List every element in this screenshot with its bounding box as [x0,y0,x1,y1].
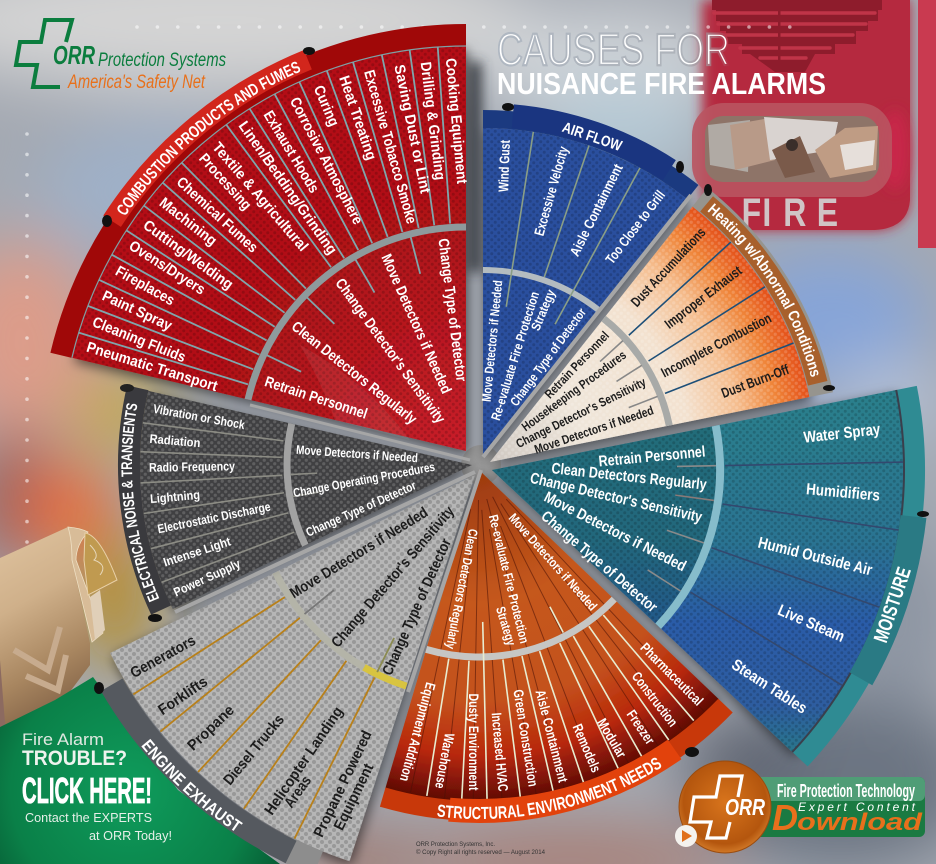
combustion inner remedies [263,238,470,428]
moisture inner remedies: Retrain Personnel [598,444,706,470]
engine exhaust outer causes [127,632,377,840]
structural outer causes: Green Construction [510,688,542,788]
electrical inner remedies: Change Type of Detector [304,478,418,540]
combustion ribbon: COMBUSTION PRODUCTS AND FUMES [117,62,300,215]
moisture outer causes: Humidifiers [805,481,881,505]
engine exhaust ribbon [94,678,296,864]
alarm strobe lens [692,103,892,197]
combustion outer causes: Drilling & Grinding [417,61,448,181]
panel: combustion products and fumes [50,24,476,460]
heating inner remedies: Move Detectors if Needed [533,403,655,457]
heating outer causes: Incomplete Combustion [658,310,774,380]
structural ribbon: STRUCTURAL ENVIRONMENT NEEDS [437,758,662,820]
call to action: green panel [0,677,280,864]
combustion outer causes: Processing [195,150,255,214]
combustion outer causes: Linen/Bedding/Grinding [235,118,340,258]
heating ribbon: Heating w/Abnormal Conditions [708,203,818,377]
structural outer causes: Modular [594,715,630,761]
scroll graphic [0,527,117,735]
logo: America's Safety Net [67,72,206,93]
sector separators [175,195,691,692]
heating inner remedies: Housekeeping Procedures [519,348,629,434]
combustion outer causes: Fireplaces [112,263,178,309]
electrical outer causes: Vibration or Shock [152,402,246,432]
call to action: green panel: CLICK HERE! [22,770,152,811]
download badge: D [772,797,798,838]
alarm FIRE lettering: FIRE [742,190,838,235]
electrical inner remedies: Move Detectors if Needed [296,443,418,465]
combustion inner remedies: Retrain Personnel [263,373,369,423]
panel: engine exhaust [94,476,476,864]
air flow outer causes: Excessive Velocity [531,144,571,237]
engine exhaust outer causes: Areas [281,773,315,811]
engine exhaust outer causes: Generators [127,632,199,682]
hub [461,445,501,485]
panel: electrical noise and transients [118,384,474,622]
engine exhaust inner remedies: Change Detector's Sensitivity [328,503,458,651]
copyright: © Copy Right all rights reserved — August 2014 [416,848,545,856]
decorative dots [27,27,800,545]
combustion outer causes: Cutting/Welding [140,217,236,293]
air flow outer causes: Too Close to Grill [602,187,668,267]
structural outer causes: Remodels [570,721,604,775]
electrical outer causes [149,402,272,599]
panel: structural environment needs [380,470,733,823]
engine exhaust outer causes: Propane Powered [310,728,376,840]
engine exhaust inner remedies: Change Type of Detector [379,536,455,678]
download badge: ORR [725,794,765,820]
heating inner remedies: Retrain Personnel [542,329,612,401]
electrical outer causes: Lightning [149,488,201,506]
electrical outer causes: Electrostatic Discharge [156,500,272,536]
download badge [675,761,925,853]
download badge: ownload [797,809,924,836]
logo: Protection Systems [98,50,226,71]
logo [16,20,226,93]
structural inner remedies [443,510,600,651]
copyright [416,841,545,856]
engine exhaust outer causes: Helicopter Landing [261,704,347,818]
combustion outer causes: Pneumatic Transport [85,339,219,395]
air flow inner remedies: Move Detectors if Needed [479,280,505,402]
structural outer causes: Pharmaceutical [637,639,707,709]
heating outer causes: Improper Exhaust [661,262,745,332]
combustion outer causes: Cleaning Fluids [90,314,188,366]
combustion inner remedies: Change Type of Detector [434,238,470,383]
combustion outer causes: Curing [310,83,342,129]
moisture outer causes [728,421,881,718]
title: CAUSES FOR [497,24,730,75]
call to action: green panel: at ORR Today! [89,828,172,843]
structural inner remedies: Move Detectors if Needed [506,510,600,614]
structural outer causes [397,639,707,792]
combustion outer causes: Exhaust Hoods [260,108,322,196]
combustion outer causes: Chemical Fumes [173,174,261,256]
electrical outer causes: Power Supply [171,557,243,599]
combustion outer causes: Ovens/Dryers [126,237,208,299]
moisture inner remedies [528,444,708,616]
structural inner remedies: Strategy [493,605,519,648]
air flow inner remedies: Change Type of Detector [507,305,589,409]
call to action: green panel: TROUBLE? [22,747,127,770]
moisture ribbon: MOISTURE [870,565,916,645]
combustion outer causes: Textile & Agricultural [209,139,311,255]
air flow outer causes [495,139,668,267]
panel: moisture [492,388,929,759]
fire alarm device [692,0,936,248]
structural inner remedies: Re-evaluate Fire Protection [486,513,532,645]
call to action: green panel: Contact the EXPERTS [25,810,152,825]
moisture inner remedies: Clean Detectors Regularly [551,460,708,494]
structural outer causes: Freezer [624,707,659,748]
air flow outer causes: Aisle Containment [566,161,626,259]
electrical outer causes: Radio Frequency [149,459,235,475]
heating inner remedies: Change Detector's Sensitivity [514,375,648,451]
air flow outer causes: Wind Gust [495,139,513,192]
electrical inner remedies: Change Operating Procedures [292,460,436,500]
electrical inner remedies [292,443,436,540]
alarm horn grille [712,0,882,72]
electrical outer causes: Intense Light [162,534,233,569]
title: NUISANCE FIRE ALARMS [497,66,826,101]
panel: heating with abnormal conditions [490,184,835,469]
structural outer causes: Aisle Containment [533,688,572,784]
structural outer causes: Dusty Environment [466,694,482,791]
electrical ribbon: ELECTRICAL NOISE & TRANSIENTS [121,403,160,602]
engine exhaust outer causes: Forklifts [155,673,211,719]
engine exhaust outer causes: Propane [184,702,238,754]
structural outer causes: Warehouse [432,732,458,790]
air flow ribbon: AIR FLOW [560,119,625,155]
moisture outer causes: Steam Tables [728,656,810,718]
engine exhaust ribbon: ENGINE EXHAUST [141,738,243,831]
engine exhaust outer causes: Diesel Trucks [220,711,288,789]
heating outer causes: Dust Burn-Off [719,361,791,401]
combustion outer causes: Corrosive Atmosphere [286,95,366,227]
air flow inner remedies: Strategy [528,287,558,333]
moisture outer causes: Water Spray [803,421,881,447]
combustion outer causes: Heat Treating [335,74,380,162]
combustion outer causes: Excessive Tobacco Smoke [360,68,420,226]
copyright: ORR Protection Systems, Inc. [416,841,495,848]
engine exhaust inner remedies [287,503,458,678]
combustion inner remedies: Clean Detectors Regularly [288,318,420,428]
combustion outer causes: Paint Spray [99,288,175,335]
air flow inner remedies [479,280,589,422]
combustion outer causes: Machining [156,194,220,250]
panel: air flow [479,103,693,457]
combustion outer causes: Cooking Equipment [442,57,470,185]
electrical outer causes: Radiation [149,432,201,450]
structural outer causes: Increased HVAC [489,712,511,792]
structural outer causes: Equipment Addition [397,681,439,783]
heating outer causes: Dust Accumulations [627,224,709,310]
title [497,24,826,101]
structural outer causes: Construction [629,668,681,730]
moisture inner remedies: Change Type of Detector [538,508,660,616]
combustion inner remedies: Move Detectors if Needed [377,252,455,396]
moisture outer causes: Humid Outside Air [756,535,874,579]
combustion outer causes: Saving Dust or Lint [390,63,434,195]
engine exhaust outer causes: Equipment [331,761,377,833]
combustion inner remedies: Change Detector's Sensitivity [332,275,449,427]
call to action: green panel: Fire Alarm [22,730,104,749]
air flow inner remedies: Re-evaluate Fire Protection [488,290,542,422]
air flow ribbon [502,103,684,173]
moisture inner remedies: Move Detectors if Needed [541,489,689,575]
moisture ribbon [861,511,929,679]
combustion outer causes [85,57,470,395]
download badge: Expert Content [798,800,916,814]
moisture inner remedies: Change Detector's Sensitivity [528,470,704,526]
heating outer causes [627,224,791,401]
logo: ORR [53,40,95,70]
engine exhaust inner remedies: Move Detectors if Needed [287,504,431,602]
moisture outer causes: Live Steam [775,602,847,646]
structural inner remedies: Clean Detectors Regularly [443,528,481,651]
